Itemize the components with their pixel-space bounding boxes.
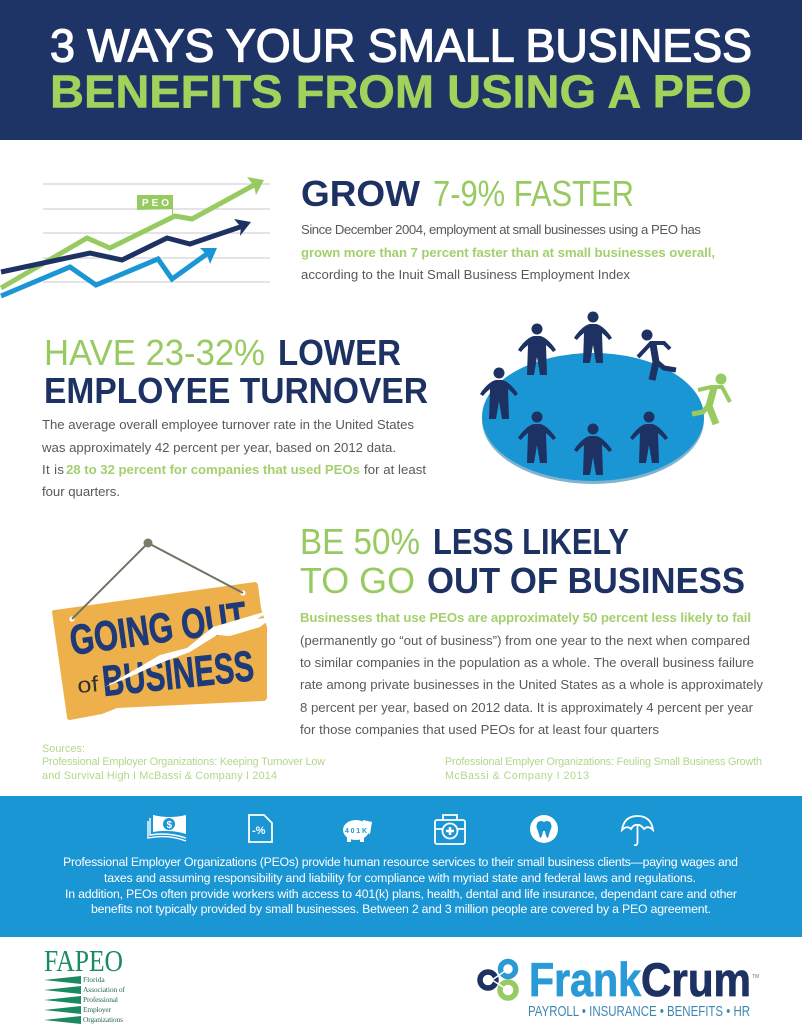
section 2 body text: was approximately 42 percent per year, based on 2012 data.: [41, 440, 396, 455]
section 1 heading: 7-9% FASTER: [433, 173, 634, 214]
blue benefits panel: [0, 796, 802, 937]
section 3 body text: 8 percent per year, based on 2012 data. It is approximately 4 percent per year: [300, 700, 754, 715]
section 3 body text: for those companies that used PEOs for at least four quarters: [300, 722, 659, 737]
running employee: [638, 330, 676, 380]
line chart: growth arrows: [1, 177, 270, 296]
section 2 body text: for at least: [364, 462, 426, 477]
section 2 heading: EMPLOYEE TURNOVER: [44, 370, 428, 411]
logo mark: [480, 962, 516, 998]
section 3 heading: BE 50%: [300, 521, 420, 562]
disc: [482, 356, 704, 484]
icon: 401k piggy bank: 401K: [345, 828, 367, 835]
section 3 heading: OUT OF BUSINESS: [427, 560, 745, 601]
FrankCrum logo: [480, 953, 759, 1020]
sources: McBassi & Company I 2013: [445, 770, 589, 782]
FAPEO logo: [44, 943, 126, 1024]
section 3 heading: LESS LIKELY: [433, 521, 629, 562]
sources: [42, 743, 762, 782]
panel paragraph: taxes and assuming responsibility and liability for compliance with myriad state and federal laws and regulations.: [104, 871, 696, 885]
section 3 body text: to similar companies in the population as a whole. The overall business failure: [300, 655, 754, 670]
green line: [1, 184, 256, 288]
hanging wire and nail: [72, 543, 243, 619]
sources: Sources:: [42, 743, 85, 755]
icon: money: $: [166, 820, 172, 831]
illustration: going out of business sign: of: [76, 671, 100, 698]
section 3 body text: rate among private businesses in the United States as a whole is approximately: [300, 677, 763, 692]
section 1 body text: grown more than 7 percent faster than at small businesses overall,: [301, 245, 715, 260]
FAPEO logo: FAPEO: [44, 943, 123, 978]
standing employees: [480, 312, 668, 475]
FrankCrum logo: TM: [752, 974, 759, 980]
sources: Professional Employer Organizations: Keeping Turnover Low: [42, 756, 325, 768]
section 2 heading: HAVE 23-32%: [44, 332, 265, 373]
FrankCrum logo: Crum: [641, 953, 751, 1006]
FAPEO logo: Florida: [83, 975, 105, 984]
navy line: [1, 225, 246, 272]
icon: first aid kit: [435, 815, 465, 844]
section 1 body text: [301, 222, 715, 282]
leaving employee in green: [692, 374, 730, 424]
section 1 heading: GROW: [301, 173, 420, 214]
icon: tooth: [530, 815, 558, 843]
section 3 heading: [300, 521, 745, 601]
icon: document with percent: -%: [252, 825, 266, 837]
icon: document with percent: [249, 815, 272, 842]
panel paragraph: In addition, PEOs often provide workers with access to 401(k) plans, health, dental and life insurance, dependant care and other: [65, 887, 737, 901]
section 2 heading: LOWER: [278, 332, 401, 373]
section 2 body text: [41, 417, 426, 499]
section 3 body text: Businesses that use PEOs are approximately 50 percent less likely to fail: [300, 610, 751, 625]
section 3 heading: TO GO: [300, 560, 415, 601]
PEO flag: PEO: [142, 198, 169, 209]
sources: Professional Emplyer Organizations: Feuling Small Business Growth: [445, 756, 762, 768]
sign text: GOING OUT: [67, 593, 250, 664]
section 1 heading: [301, 173, 634, 214]
PEO flag: [137, 195, 173, 217]
sign board: [52, 582, 267, 720]
illustration: going out of business sign: [52, 538, 274, 720]
panel paragraph: benefits not typically provided by small businesses. Between 2 and 3 million people are covered by a PEO agreement.: [91, 902, 711, 916]
section 2 body text: The average overall employee turnover rate in the United States: [42, 417, 414, 432]
FAPEO logo: Association of: [83, 985, 126, 994]
section 3 body text: [300, 610, 763, 737]
section 2 body text: 28 to 32 percent for companies that used PEOs: [66, 462, 360, 477]
panel paragraph: Professional Employer Organizations (PEOs) provide human resource services to their small business clients—paying wages and: [63, 855, 738, 869]
section 1 body text: Since December 2004, employment at small businesses using a PEO has: [301, 222, 701, 237]
FAPEO logo: Employer: [83, 1005, 112, 1014]
blue line: [1, 251, 211, 296]
section 2 heading: [44, 332, 428, 411]
panel paragraph: [63, 855, 738, 916]
illustration: team on a disc with employee leaving: [480, 312, 730, 484]
title line 2: BENEFITS FROM USING A PEO: [50, 66, 752, 118]
icon: umbrella: [622, 816, 653, 845]
section 2 body text: four quarters.: [42, 484, 120, 499]
section 1 body text: according to the Inuit Small Business Employment Index: [301, 267, 630, 282]
section 3 body text: (permanently go “out of business”) from one year to the next when compared: [300, 633, 750, 648]
FAPEO logo: Professional: [83, 995, 118, 1004]
header banner: [0, 0, 802, 140]
wordmark: Frank: [529, 953, 642, 1006]
FAPEO logo: Organizations: [83, 1015, 123, 1024]
sources: and Survival High I McBassi & Company I 2014: [42, 770, 277, 782]
illustration: going out of business sign: BUSINESS: [100, 642, 256, 706]
title line 1: 3 WAYS YOUR SMALL BUSINESS: [50, 20, 752, 72]
section 2 body text: It is: [42, 462, 64, 477]
icon: money: [148, 815, 186, 841]
icon: 401k piggy bank: [343, 820, 372, 842]
crack: [105, 609, 274, 687]
